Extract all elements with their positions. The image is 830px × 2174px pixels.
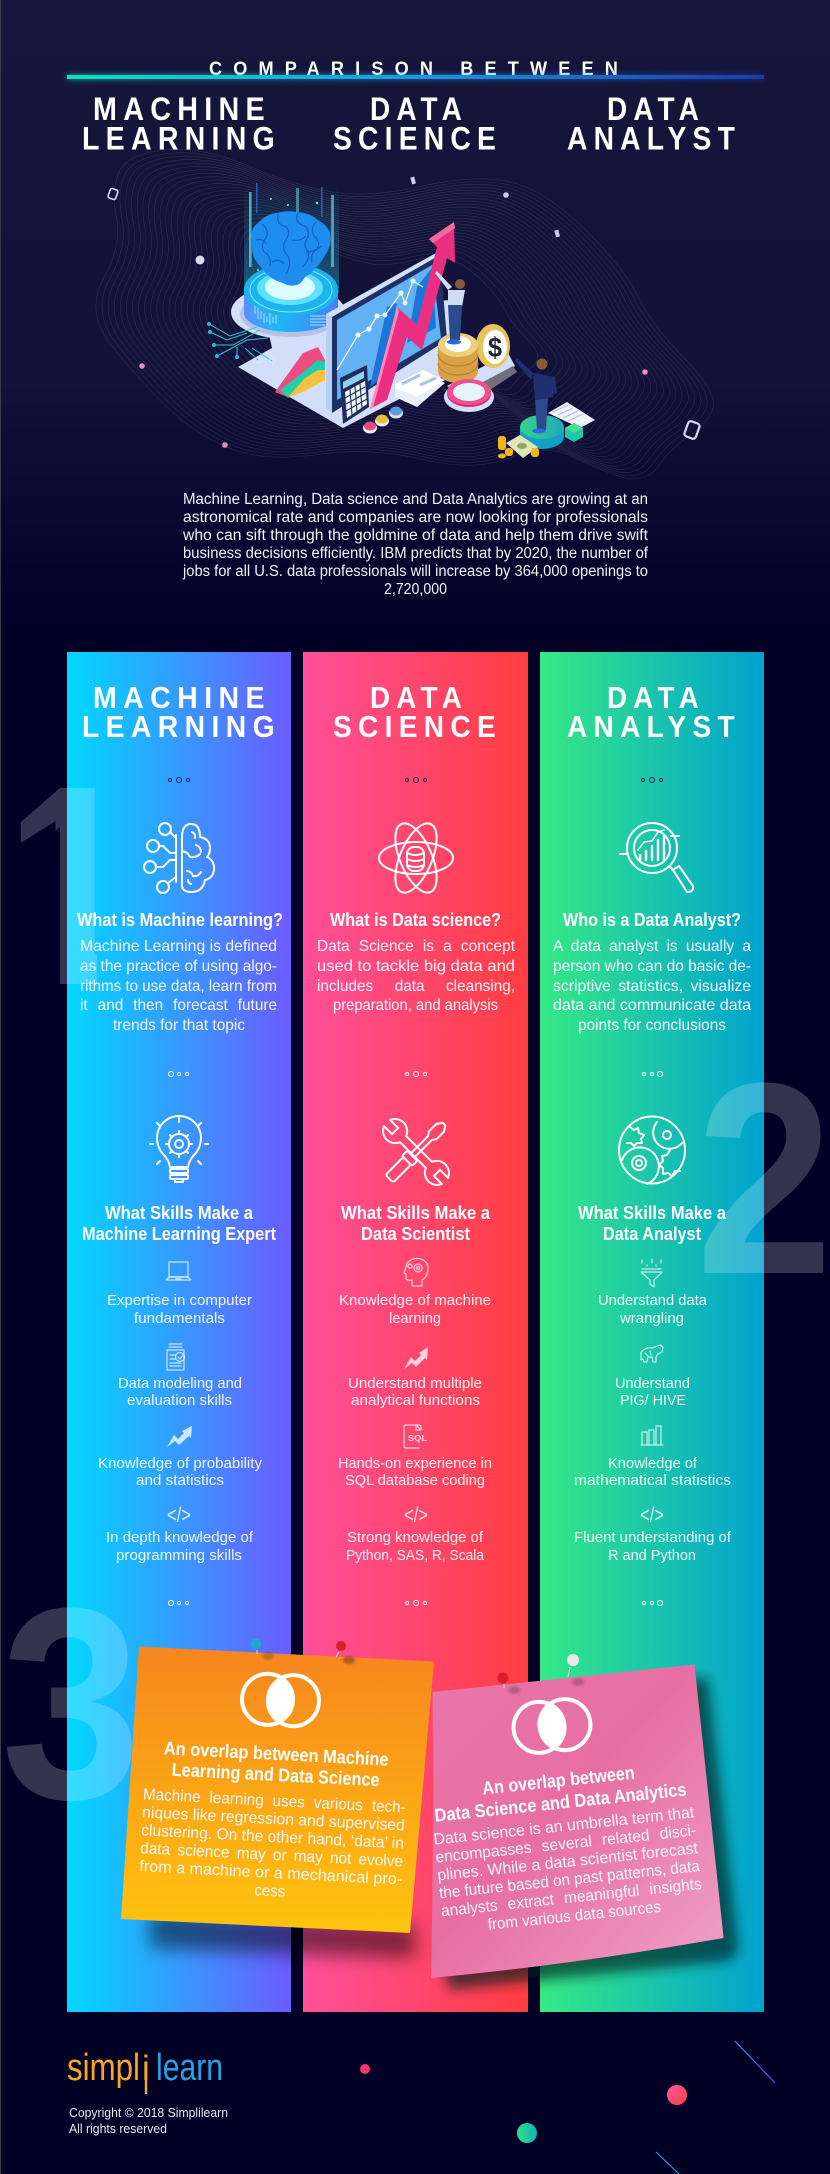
heading (162, 1737, 389, 1791)
logo: simplilearn: i (142, 2049, 150, 2088)
icon: rhino (641, 1345, 663, 1362)
text block: who is a data analyst: data and communicate data (553, 997, 751, 1014)
push pins (250, 1638, 584, 1694)
title: three disciplines: LEARNING (82, 120, 281, 156)
body text: the future based on past patterns, data (438, 1858, 701, 1902)
text block: machine learning skills (82, 1202, 276, 1564)
heading (431, 1756, 687, 1826)
skill: data wrangling: wrangling (619, 1310, 684, 1327)
text block: what is machine learning: trends for that topic (113, 1017, 245, 1034)
illustration: gold coins (438, 324, 510, 383)
skill: mathematical statistics: mathematical statistics (574, 1472, 731, 1489)
illustration: monitor (326, 253, 447, 413)
body text: encompasses several related disci- (435, 1822, 697, 1867)
intro paragraph: jobs for all U.S. data professionals will increase by 364,000 openings to (182, 563, 648, 580)
text block: who is a data analyst: A data analyst is usually a (553, 938, 751, 955)
body text: Machine learning uses various tech- (143, 1786, 406, 1817)
icon: sql file: SQL (408, 1433, 427, 1443)
skill: probability and statistics: and statistics (136, 1472, 224, 1489)
panel: data analyst column (540, 652, 764, 2012)
heading: skills data analyst: What Skills Make a (578, 1202, 727, 1223)
heading: skills data analyst: Data Analyst (603, 1223, 701, 1244)
illustration: paper stack (395, 370, 445, 407)
text block: what is machine learning (77, 909, 283, 1034)
heading: An overlap between (481, 1762, 636, 1799)
body text: analysts extract meaningful insights (440, 1876, 703, 1920)
icon: document check (167, 1344, 184, 1370)
footer decoration (360, 2041, 775, 2174)
text block: what is data science: preparation, and analysis (333, 997, 498, 1014)
icon: brain circuit (144, 823, 214, 893)
heading: Data Science and Data Analytics (434, 1778, 687, 1826)
panel: data science column (303, 652, 528, 2012)
skill: sql coding: SQL database coding (345, 1472, 485, 1489)
skill: r and python: R and Python (608, 1547, 696, 1564)
skill: analytical functions: Understand multiple (348, 1375, 482, 1392)
card shadow (150, 1912, 415, 1958)
logo: simplilearn: learn (156, 2047, 223, 2089)
title: comparison between: COMPARISON BETWEEN (209, 58, 629, 80)
panel: machine learning column (67, 652, 291, 2012)
skill: pig hive: Understand (615, 1375, 690, 1392)
intro paragraph: who can sift through the goldmine of data and help them drive swift (182, 527, 649, 544)
title: three disciplines: DATA (370, 91, 468, 127)
text block: what is machine learning: rithms to use data, learn from (80, 978, 277, 995)
icon: code tag: </> (167, 1504, 191, 1527)
icon: magnifier chart (620, 823, 693, 892)
illustration: hologram glow (244, 183, 339, 293)
body text: from a machine or a mechanical pro- (139, 1858, 402, 1888)
illustration: brain (252, 211, 331, 286)
text block: data science skills (338, 1202, 492, 1564)
body text: cess (254, 1882, 286, 1901)
text block: who is a data analyst: scriptive statistics, visualize (553, 978, 751, 995)
skill: data modeling (118, 1375, 242, 1409)
illustration: buttons (363, 406, 403, 434)
intro paragraph: 2,720,000 (384, 581, 447, 598)
copyright (69, 2105, 228, 2136)
intro paragraph: business decisions efficiently. IBM predicts that by 2020, the number of (183, 545, 649, 562)
text block: what is machine learning: it and then forecast future (80, 997, 277, 1014)
icon: overlap circles (241, 1673, 320, 1727)
column headings: MACHINE (93, 680, 271, 715)
icon: rising arrow (167, 1426, 192, 1447)
heading: skills data analyst (578, 1202, 727, 1244)
icon: overlap circles (511, 1697, 593, 1755)
card content (138, 1668, 412, 1907)
body text: Data science is an umbrella term that (433, 1804, 696, 1849)
column headings: DATA (607, 680, 705, 715)
skill: python sas r scala: Python, SAS, R, Scala (346, 1547, 485, 1564)
skill: computer fundamentals (107, 1292, 252, 1327)
heading: skills data scientist: Data Scientist (361, 1223, 470, 1244)
text block: what is data science: includes data cleansing, (317, 978, 515, 995)
body text: niques like regression and supervised (142, 1804, 405, 1835)
column headings: SCIENCE (333, 709, 502, 744)
column headings: DATA (370, 680, 468, 715)
skill: computer fundamentals: fundamentals (134, 1310, 225, 1327)
floating decorative shapes (108, 177, 700, 448)
illustration: calculator (340, 365, 369, 424)
note card: pink overlap (420, 1664, 738, 1990)
illustration: platform (231, 285, 515, 428)
logo: simplilearn: simpl (67, 2047, 140, 2089)
icon: laptop (166, 1262, 191, 1280)
heading: skills data scientist (341, 1202, 491, 1244)
text block: who is a data analyst: Who is a Data Analyst? (563, 909, 741, 930)
title: three disciplines (82, 91, 741, 156)
column headings: ANALYST (567, 709, 741, 744)
title: three disciplines: SCIENCE (333, 120, 502, 156)
card sheet (431, 1664, 724, 1978)
card content (420, 1687, 705, 1939)
text block: who is a data analyst: points for conclusions (578, 1017, 726, 1034)
heading: skills machine learning: What Skills Make a (105, 1202, 254, 1223)
intro paragraph: astronomical rate and companies are now looking for professionals (183, 509, 648, 526)
icon: sql file (404, 1425, 427, 1448)
card sheet (121, 1646, 434, 1933)
illustration: glowing disc (244, 264, 338, 332)
copyright: All rights reserved (69, 2121, 167, 2136)
icon: funnel (641, 1259, 662, 1287)
illustration: man pointing (515, 358, 557, 434)
text block: what is data science (317, 909, 516, 1014)
divider dots row 1 (168, 778, 662, 782)
text block: who is a data analyst (553, 909, 751, 1034)
isometric illustration (208, 183, 595, 458)
icon: code tag: </> (640, 1504, 664, 1527)
body text (433, 1804, 705, 1939)
illustration: man at arrow (435, 271, 465, 344)
skill: machine learning knowledge: learning (389, 1310, 441, 1327)
note card: orange overlap (121, 1646, 434, 1958)
skill: mathematical statistics: Knowledge of (608, 1455, 698, 1472)
icon: bar chart (641, 1426, 663, 1445)
skill: programming: In depth knowledge of (106, 1529, 254, 1546)
illustration: area chart (275, 347, 325, 398)
column headings: LEARNING (82, 709, 281, 744)
heading: skills data scientist: What Skills Make a (341, 1202, 491, 1223)
copyright: Copyright © 2018 Simplilearn (69, 2105, 228, 2120)
text block: who is a data analyst: person who can do basic de- (553, 958, 751, 975)
skill: data wrangling (598, 1292, 708, 1327)
illustration: cash and coins (498, 435, 539, 458)
illustration: gold coins: $ (488, 332, 502, 363)
icon: code tag: </> (404, 1504, 428, 1527)
title: three disciplines: DATA (607, 91, 705, 127)
skill: pig hive: PIG/ HIVE (620, 1392, 686, 1409)
icon: light bulb gear (150, 1116, 208, 1182)
body text: data science may or may not evolve (140, 1840, 403, 1871)
skill: analytical functions (348, 1375, 482, 1409)
wavy contour line background (96, 149, 714, 479)
skill: analytical functions: analytical functions (351, 1392, 480, 1409)
skill: sql coding: Hands-on experience in (338, 1455, 492, 1472)
big number 3: 3 (1, 1551, 141, 1856)
column headings (82, 680, 741, 744)
body text: plines. While a data scientist forecast (436, 1840, 699, 1884)
skill: programming (106, 1529, 254, 1564)
skill: python sas r scala: Strong knowledge of (347, 1529, 484, 1546)
logo: simplilearn (67, 2047, 223, 2094)
heading: skills machine learning: Machine Learning Expert (82, 1223, 276, 1244)
icon: atom database (379, 818, 453, 898)
skill: sql coding (338, 1455, 492, 1489)
icon: head with gear (404, 1259, 428, 1286)
card shadow (440, 1678, 738, 1990)
skill: r and python (574, 1529, 732, 1564)
heading: Learning and Data Science (171, 1759, 380, 1790)
text block: data analyst skills (574, 1202, 732, 1564)
icon: rising arrow (404, 1347, 428, 1369)
skill: probability and statistics (98, 1455, 262, 1489)
text block: what is data science: What is Data science? (330, 909, 501, 930)
text block: what is machine learning: Machine Learning is defined (80, 938, 277, 955)
heading: skills machine learning (82, 1202, 276, 1244)
divider dots row 3 (168, 1600, 662, 1606)
intro paragraph (182, 491, 649, 598)
skill: computer fundamentals: Expertise in computer (107, 1292, 252, 1309)
text block: what is machine learning: What is Machine learning? (77, 909, 283, 930)
illustration: magnifier (444, 366, 517, 412)
intro paragraph: Machine Learning, Data science and Data Analytics are growing at an (183, 491, 648, 508)
icon: globe gears (619, 1116, 685, 1184)
text block: what is data science: Data Science is a concept (317, 938, 516, 955)
skill: machine learning knowledge (339, 1292, 491, 1327)
skill: r and python: Fluent understanding of (574, 1529, 732, 1546)
title rule (67, 74, 764, 80)
skill: mathematical statistics (574, 1455, 731, 1489)
text block: what is machine learning: as the practice of using algo- (80, 958, 277, 975)
skill: probability and statistics: Knowledge of probability (98, 1455, 262, 1472)
icon: crossed tools (379, 1115, 453, 1189)
illustration: teal pedestal and book (520, 402, 595, 449)
title: three disciplines: MACHINE (93, 91, 271, 127)
skill: data wrangling: Understand data (598, 1292, 708, 1309)
skill: programming: programming skills (116, 1547, 242, 1564)
skill: data modeling: evaluation skills (127, 1392, 232, 1409)
title: three disciplines: ANALYST (567, 120, 741, 156)
illustration: circuit lines (208, 322, 274, 364)
skill: data modeling: Data modeling and (118, 1375, 242, 1392)
divider dots row 2 (168, 1072, 662, 1076)
body text: clustering. On the other hand, ‘data’ in (141, 1822, 404, 1853)
heading: An overlap between Machine (163, 1737, 389, 1770)
body text: from various data sources (487, 1899, 662, 1934)
body text (138, 1786, 406, 1907)
skill: machine learning knowledge: Knowledge of machine (339, 1292, 491, 1309)
skill: pig hive (615, 1375, 690, 1409)
illustration: rising arrow (370, 222, 455, 409)
skill: python sas r scala (346, 1529, 485, 1564)
text block: what is data science: used to tackle big data and (317, 958, 515, 975)
